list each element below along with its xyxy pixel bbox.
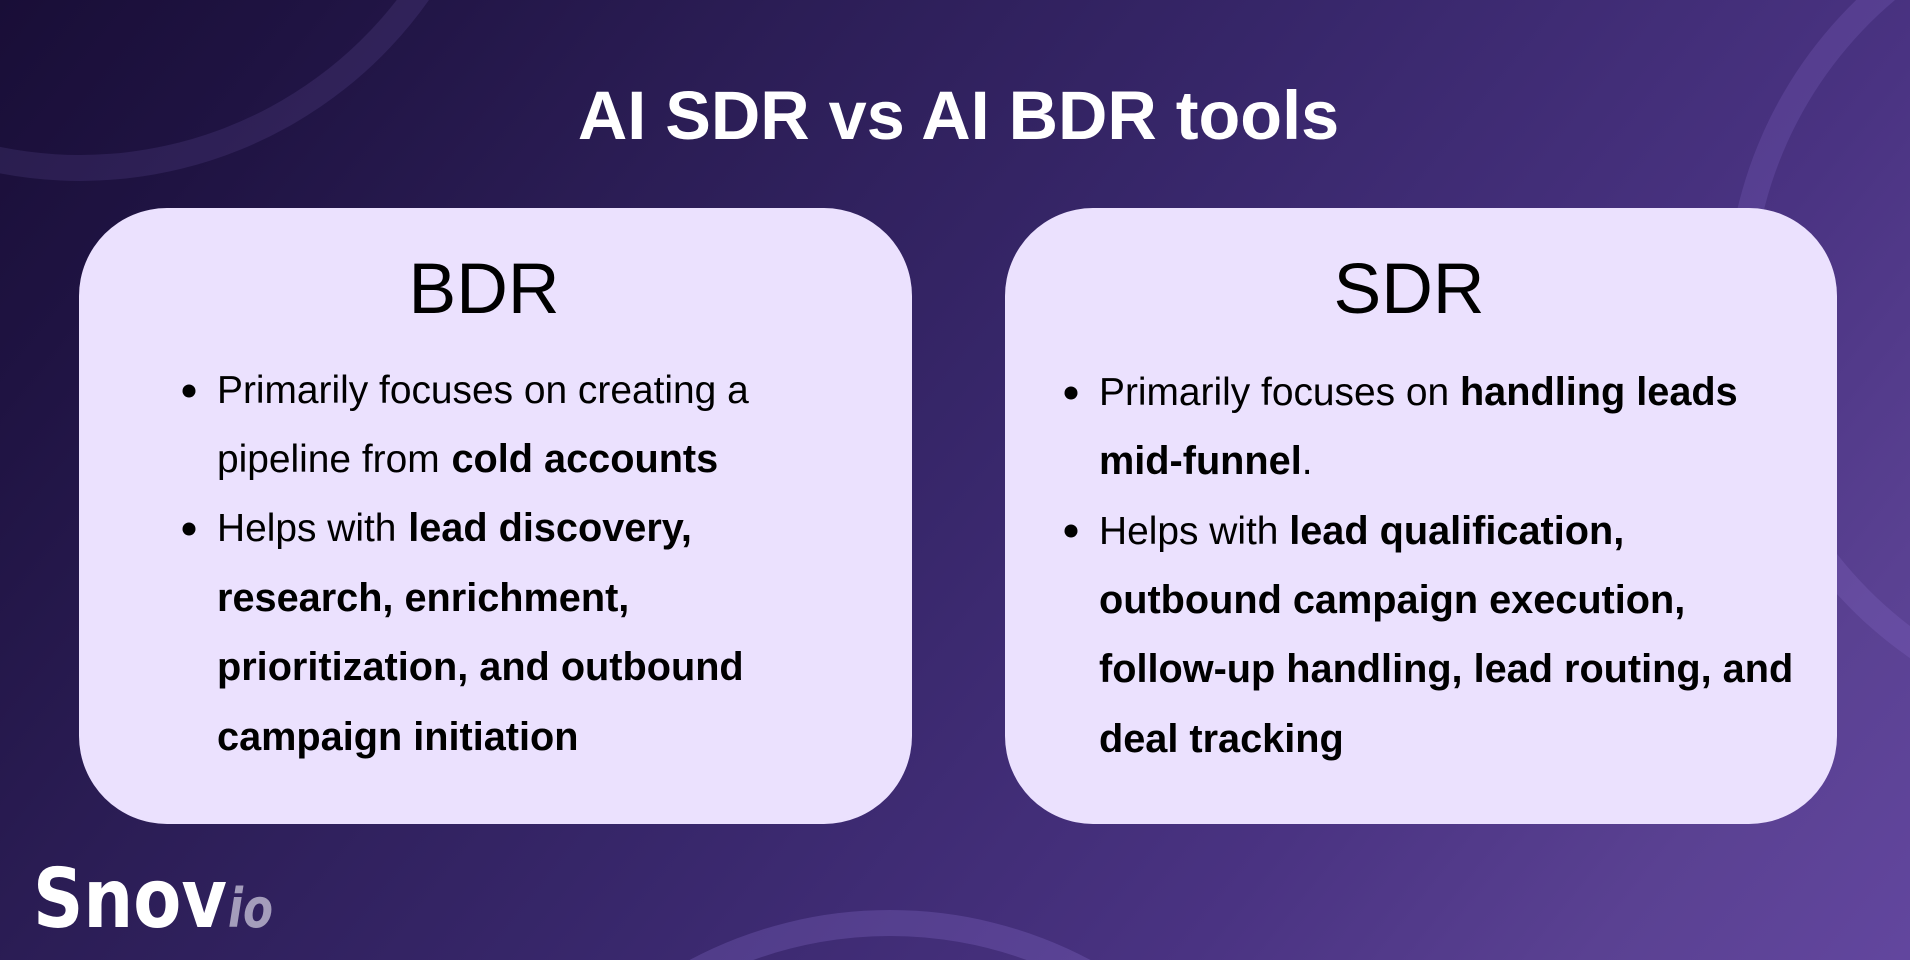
BDR bullet 2: prioritization, and outbound: [217, 645, 744, 689]
BDR card background: [79, 208, 912, 824]
SDR bullet 2: outbound campaign execution,: [1099, 578, 1685, 622]
BDR heading: BDR: [409, 249, 559, 329]
SDR bullet 1: Primarily focuses on handling leads: [1099, 370, 1738, 414]
SDR bullet 2: [1064, 509, 1793, 761]
logo: Snov.io: io: [228, 877, 273, 940]
SDR bullet 2: follow-up handling, lead routing, and: [1099, 647, 1793, 691]
BDR bullet 1: pipeline from cold accounts: [217, 437, 718, 481]
logo: Snov.io: Snov: [33, 852, 227, 947]
decorative ring: right: [1726, 0, 1910, 658]
SDR bullet 2: deal tracking: [1099, 717, 1344, 761]
decorative ring: top left: [0, 0, 429, 181]
title: AI SDR vs AI BDR tools: [578, 78, 1339, 154]
BDR bullet 2: Helps with lead discovery,: [217, 506, 692, 550]
BDR bullet 1: [182, 369, 749, 481]
BDR bullet 2: research, enrichment,: [217, 576, 629, 620]
SDR bullet 1: mid-funnel.: [1099, 439, 1313, 483]
SDR card background: [1005, 208, 1837, 824]
decorative ring: bottom: [690, 910, 1090, 960]
SDR bullet 2: Helps with lead qualification,: [1099, 509, 1624, 553]
BDR bullet 2: [182, 506, 744, 759]
SDR bullet 1: [1064, 370, 1738, 483]
BDR bullet 2: campaign initiation: [217, 715, 578, 759]
BDR bullet 1: Primarily focuses on creating a: [217, 369, 749, 412]
panel: SDR: [1005, 208, 1837, 824]
SDR heading: SDR: [1334, 249, 1484, 329]
panel: BDR: [79, 208, 912, 824]
